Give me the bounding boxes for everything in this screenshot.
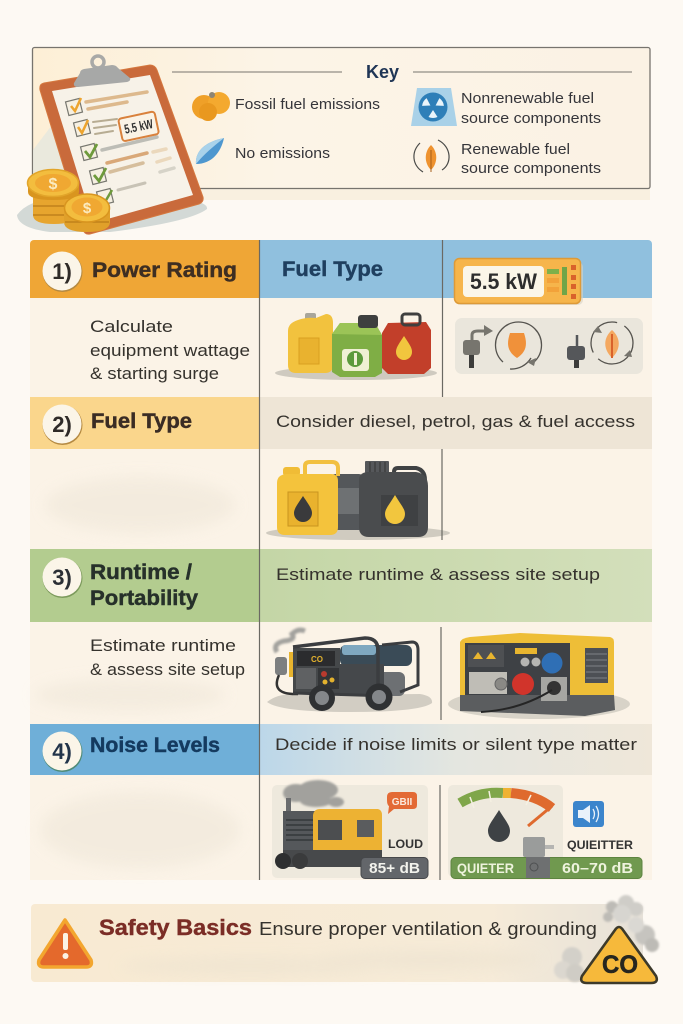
number badge 3: 3) [52,565,72,590]
number badge 2 [42,404,82,445]
label: renewable fuel [461,141,601,177]
icon: no emissions leaf [196,138,224,164]
illustration: enclosed generator [448,633,630,719]
illustration: yellow and black fuel cans [266,461,450,540]
icon: coin stacks [28,170,110,232]
pill: quieter 60-70 dB [451,858,642,878]
row 4: noise levels [30,724,652,878]
icon: renewable fuel [414,140,449,172]
illustration: three fuel cans [275,313,437,380]
illustration: portable generator: CO [311,655,323,664]
band: fuel type description [260,397,652,449]
row 3: runtime / portability [30,549,652,719]
label: renewable fuel: source components [461,160,601,177]
panel: safety basics [31,895,659,983]
text: power rating description [90,317,250,383]
panel: loud generator [272,780,428,878]
icon: speech bubble [387,792,417,814]
pill: 85+ dB: 85+ dB [369,860,420,877]
icon: coin stacks: $ [83,200,92,217]
pill: quieter 60-70 dB: 60–70 dB [562,860,633,877]
heading: safety basics: Safety Basics [99,915,252,940]
panel: fuel source components [455,318,643,374]
heading: noise levels: Noise Levels [90,734,220,757]
header band: runtime [30,549,259,622]
panel: key [32,48,650,200]
panel: quieter generator [448,785,642,878]
heading: power rating: Power Rating [92,259,237,282]
illustration: 5.5 kW meter [454,258,583,305]
text: power rating description: equipment wattage [90,341,250,360]
icon: valve [523,837,554,878]
text: runtime description: Estimate runtime [90,636,236,655]
text: runtime description: & assess site setup [90,660,245,679]
heading: runtime / portability [90,561,198,610]
label: nonrenewable fuel: Nonrenewable fuel [461,90,594,107]
icon: plug with renewable flame [567,322,633,368]
text: runtime band: Estimate runtime & assess site setup [276,565,600,584]
icon: fossil fuel emissions [192,92,230,121]
icon: warning triangle [39,920,91,967]
column dividers [260,240,442,880]
text: fuel type description: Consider diesel, petrol, gas & fuel access [276,412,635,431]
header band: noise levels [30,724,259,775]
checklist [66,92,174,205]
text: runtime description [90,636,245,679]
row 1: power rating [30,240,652,383]
pill: 85+ dB [361,858,428,878]
icon: carbon monoxide warning: CO [602,951,638,979]
header band: fuel type blue [260,240,652,298]
label: quieitter: QUIEITTER [567,838,633,852]
number badge 2: 2) [52,412,72,437]
text: power rating description: Calculate [90,317,173,336]
band: runtime description [260,549,652,622]
chart: noise gauge [460,791,552,826]
number badge 1: 1) [52,259,72,284]
label: no emissions: No emissions [235,145,330,162]
header band: fuel type [30,397,259,449]
icon: carbon monoxide warning [581,927,657,983]
text: noise description: Decide if noise limits or silent type matter [275,735,637,754]
heading: key: Key [366,62,399,82]
label: nonrenewable fuel [461,90,601,127]
heading: fuel type: Fuel Type [282,258,383,281]
label: renewable fuel: Renewable fuel [461,141,570,158]
illustration: portable generator [267,630,432,712]
illustration: clipboard with coins [17,56,207,234]
icon: oil drop [488,810,510,842]
text: safety description: Ensure proper ventilation & grounding [259,919,597,939]
icon: plug with arrow and flame [463,322,542,369]
icon: coin stacks: $ [49,176,58,193]
number badge 4: 4) [52,739,72,764]
label: 5.5 kW on clipboard: 5.5 kW [123,116,155,137]
number badge 4 [42,732,82,772]
label: loud: LOUD [388,837,423,851]
label: fossil fuel emissions: Fossil fuel emissions [235,96,380,113]
icon: smoke [554,895,659,982]
label: nonrenewable fuel: source components [461,110,601,127]
table background [30,298,652,880]
heading: runtime / portability: Portability [90,587,198,610]
header band: power rating [30,240,259,298]
label: 5.5 kW reading: 5.5 kW [470,269,537,294]
text: power rating description: & starting surge [90,364,219,383]
label: 5.5 kW on clipboard [118,111,159,141]
band: noise description [260,724,652,775]
pill: quieter 60-70 dB: QUIETER [457,860,514,876]
number badge 3 [42,558,82,598]
number badge 1 [42,252,82,292]
heading: runtime / portability: Runtime / [90,561,192,584]
icon: speech bubble: GBII [392,797,412,808]
row 2: fuel type [30,397,652,540]
icon: nonrenewable fuel [411,88,457,126]
icon: speaker [573,801,604,827]
heading: fuel type: Fuel Type [91,410,192,433]
